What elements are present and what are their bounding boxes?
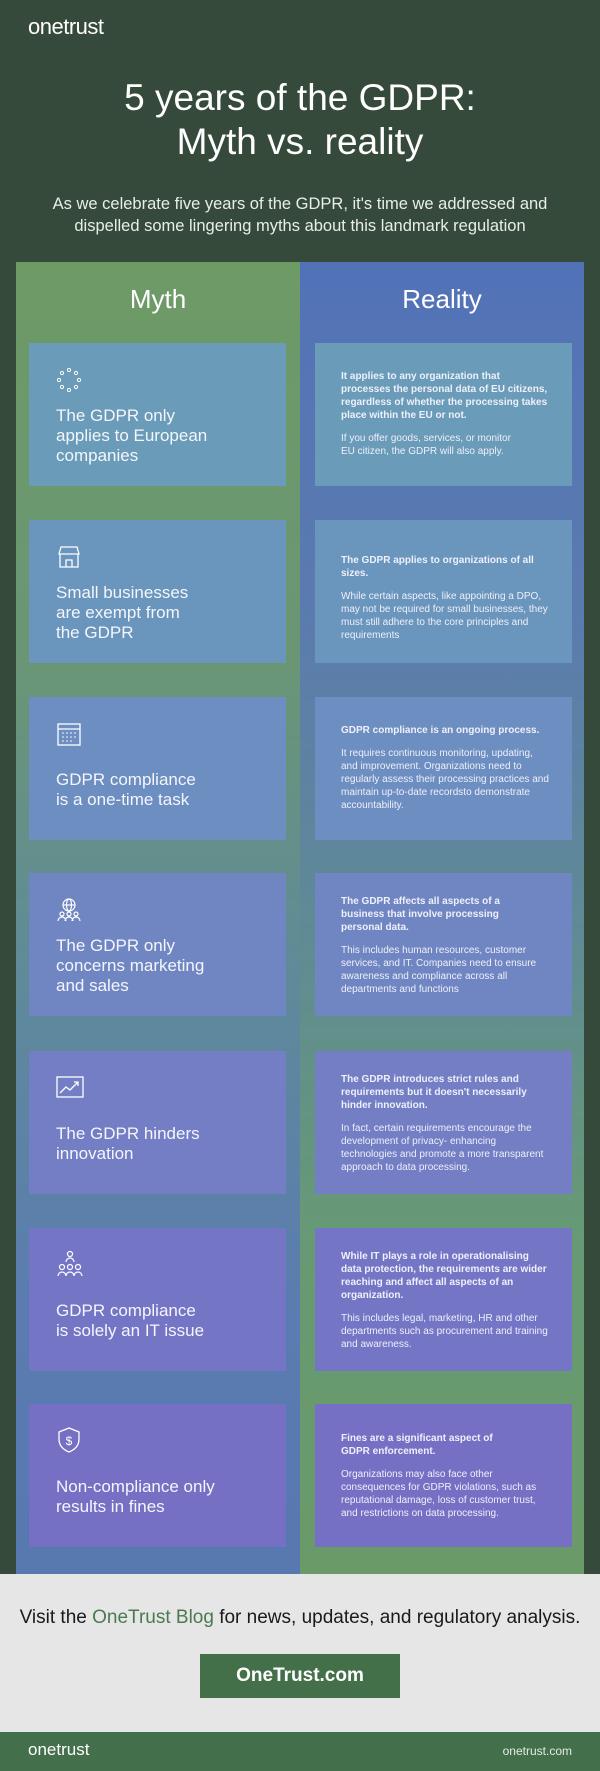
myth text 4: The GDPR only (56, 936, 175, 955)
card row 3 myth (29, 697, 286, 840)
cta text: Visit the OneTrust Blog for news, updates, and regulatory analysis. (20, 1607, 580, 1628)
card row 4 myth (29, 873, 286, 1016)
card row 5 myth (29, 1051, 286, 1194)
myth text 1 (56, 406, 207, 465)
myth text 4 (56, 936, 204, 995)
card row 2 reality: While certain aspects, like appointing a DPO, may not be required for small businesses, they must still adhere to the core principles and requirements (341, 591, 548, 641)
myth text 5: The GDPR hinders (56, 1124, 200, 1143)
card row 5 reality: The GDPR introduces strict rules and requirements but it doesn't necessarily hinder innovation. (341, 1074, 527, 1111)
card row 5 reality: In fact, certain requirements encourage the development of privacy- enhancing technologies and promote a more transparent approach to data processing. (341, 1123, 543, 1173)
card row 6 reality (315, 1228, 572, 1371)
footer cta panel (0, 1574, 600, 1732)
myth text 3: GDPR compliance (56, 770, 196, 789)
card row 1 reality (315, 343, 572, 486)
myth text 7: results in fines (56, 1497, 165, 1516)
card row 1 reality: If you offer goods, services, or monitor (341, 433, 511, 444)
card row 4 reality: business that involve processing (341, 909, 499, 920)
myth text 5 (56, 1124, 200, 1163)
card row 6 myth (29, 1228, 286, 1371)
myth text 2: are exempt from (56, 603, 180, 622)
card row 6 reality: This includes legal, marketing, HR and other departments such as procurement and training and awareness. (341, 1313, 548, 1350)
icon: calendar (57, 723, 81, 746)
icon: org chart people (57, 1250, 82, 1276)
card row 3 reality (315, 697, 572, 840)
card row 4 reality: The GDPR affects all aspects of a (341, 896, 500, 907)
card row 7 reality: Fines are a significant aspect of (341, 1433, 493, 1444)
card row 4 reality (315, 873, 572, 1016)
subtitle: dispelled some lingering myths about this landmark regulation (74, 217, 526, 235)
card row 7 reality: Organizations may also face other consequences for GDPR violations, such as reputational damage, loss of customer trust, and restrictions on data processing. (341, 1469, 536, 1519)
card row 7 reality (315, 1404, 572, 1547)
card row 1 reality: It applies to any organization that processes the personal data of EU citizens, regardless of whether the processing takes place within the EU or not. (341, 371, 547, 421)
myth text 3 (56, 770, 196, 809)
card row 6 reality: While IT plays a role in operationalising data protection, the requirements are wider reaching and affect all aspects of an organization. (341, 1251, 547, 1301)
myth text 6: is solely an IT issue (56, 1321, 204, 1340)
icon: chart (56, 1076, 84, 1098)
title: 5 years of the GDPR: (124, 77, 476, 118)
card row 7 myth (29, 1404, 286, 1547)
heading: myth: Myth (130, 284, 186, 314)
logo: onetrust (28, 14, 104, 39)
myth text 3: is a one-time task (56, 790, 189, 809)
card row 3 reality: It requires continuous monitoring, updating, and improvement. Organizations need to regularly assess their processing practices and maintain up-to-date recordsto demonstrate accountability. (341, 748, 549, 811)
card row 1 myth (29, 343, 286, 486)
footer bar (0, 1732, 600, 1771)
icon: shield dollar (58, 1427, 80, 1453)
card row 2 reality (315, 520, 572, 663)
card row 5 reality (315, 1051, 572, 1194)
button: OneTrust.com (236, 1665, 364, 1686)
icon: globe people (57, 898, 80, 921)
panel: myth column (16, 262, 300, 1574)
myth text 5: innovation (56, 1144, 134, 1163)
title: Myth vs. reality (177, 121, 423, 162)
subtitle (52, 195, 547, 235)
heading: reality: Reality (402, 284, 482, 314)
card row 7 reality: GDPR enforcement. (341, 1446, 435, 1457)
title (124, 77, 476, 162)
myth text 2 (56, 583, 188, 642)
icon: shield dollar: $ (66, 1434, 73, 1448)
myth text 2: the GDPR (56, 623, 133, 642)
subtitle: As we celebrate five years of the GDPR, it's time we addressed and (53, 195, 547, 213)
button (200, 1654, 400, 1698)
card row 3 reality: GDPR compliance is an ongoing process. (341, 725, 539, 736)
myth text 1: The GDPR only (56, 406, 175, 425)
myth text 7: Non-compliance only (56, 1477, 215, 1496)
card row 4 reality: This includes human resources, customer services, and IT. Companies need to ensure awareness and compliance across all departments and functions (341, 945, 536, 995)
myth text 7 (56, 1477, 215, 1516)
card row 2 reality: The GDPR applies to organizations of all sizes. (341, 555, 534, 579)
myth text 4: concerns marketing (56, 956, 204, 975)
myth text 6 (56, 1301, 204, 1340)
myth text 2: Small businesses (56, 583, 188, 602)
myth text 4: and sales (56, 976, 129, 995)
icon: EU stars (56, 368, 82, 392)
myth text 1: applies to European (56, 426, 207, 445)
card row 1 reality: EU citizen, the GDPR will also apply. (341, 446, 504, 457)
panel: reality column (300, 262, 584, 1574)
card row 2 myth (29, 520, 286, 663)
myth text 1: companies (56, 446, 138, 465)
footer url: onetrust.com (503, 1744, 572, 1758)
footer logo: onetrust (28, 1740, 89, 1759)
myth text 6: GDPR compliance (56, 1301, 196, 1320)
icon: shop (58, 546, 80, 568)
card row 4 reality: personal data. (341, 922, 409, 933)
